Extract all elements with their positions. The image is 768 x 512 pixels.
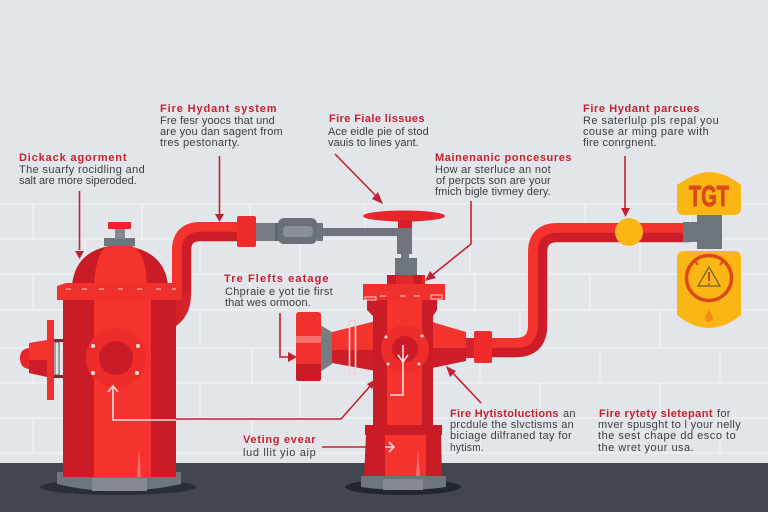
label: mainenanic poncesures: How ar sterluce an not	[435, 164, 551, 176]
label: fire hydant system	[160, 103, 283, 149]
left hydrant	[20, 222, 196, 495]
label: fire hytistoluctions: an	[563, 408, 576, 420]
label: fire rytety sletepant: for	[717, 408, 731, 420]
arrow: white centre	[390, 345, 408, 395]
label: tre flefts eatage	[224, 273, 333, 309]
label: veting evear	[243, 434, 316, 459]
right hydrant	[296, 210, 690, 495]
label: fire hydant system: Fre fesr yoocs that und	[160, 115, 275, 127]
label: fire fiale issues: Ace eidle pie of stod	[328, 126, 429, 138]
label: tre flefts eatage: Tre Flefts eatage	[224, 273, 329, 285]
label: veting evear: Veting evear	[243, 434, 316, 446]
warning gauge panel	[677, 251, 741, 328]
cap	[104, 222, 135, 246]
base	[361, 476, 446, 490]
label: dickack agorment: Dickack agorment	[19, 152, 127, 164]
outlet pipe to right	[490, 232, 690, 352]
yellow valve ball	[615, 218, 643, 246]
base	[57, 472, 181, 491]
ground	[0, 463, 768, 512]
label: fire hydant system: tres pestonarty.	[160, 137, 240, 149]
body	[63, 300, 176, 477]
label: fire hydant parcues	[583, 103, 719, 149]
left arm	[296, 312, 376, 381]
label: tre flefts eatage: Chpraie e yot tie first	[225, 286, 333, 298]
side nozzle	[20, 320, 64, 400]
label: fire hydant parcues: Fire Hydant parcues	[583, 103, 700, 115]
label: mainenanic poncesures	[435, 152, 572, 198]
label: fire hydant parcues: couse ar ming pare with	[583, 126, 709, 138]
valve stem	[395, 228, 417, 275]
handwheel	[363, 210, 445, 228]
label: fire hytistoluctions: Fire Hytistoluctions	[450, 408, 559, 420]
collar	[57, 283, 182, 300]
label: fire rytety sletepant: mver spusght to l your nelly	[598, 419, 741, 431]
label: mainenanic poncesures: fmich bigle tivmey dery.	[435, 186, 551, 198]
TGT sign: TGT	[689, 181, 729, 213]
label: fire hydant parcues: fire conrgnent.	[583, 137, 657, 149]
label: dickack agorment	[19, 152, 145, 187]
label: fire hytistoluctions	[450, 408, 576, 454]
label: fire hytistoluctions: hytism.	[450, 442, 484, 454]
grey coupler and rod	[256, 218, 403, 244]
left pipe	[168, 216, 403, 320]
body	[367, 300, 437, 425]
TGT sign	[677, 172, 741, 215]
label: mainenanic poncesures: of perpcts son are your	[436, 175, 551, 187]
connector	[683, 215, 722, 249]
label: fire rytety sletepant: the sest chape dd esco to	[598, 430, 736, 442]
arrows	[75, 154, 630, 452]
lower barrel	[365, 425, 442, 435]
port	[86, 328, 146, 388]
port	[381, 325, 429, 373]
pipe flange	[237, 216, 256, 247]
label: fire hydant system: are you dan sagent from	[160, 126, 283, 138]
gauge assembly	[615, 172, 741, 328]
label: fire hytistoluctions: prcdule the slvctisms an	[450, 419, 574, 431]
label: fire rytety sletepant: the wret your usa.	[598, 442, 694, 454]
label: fire hydant parcues: Re saterlulp pls repal you	[583, 115, 719, 127]
label: fire rytety sletepant	[598, 408, 741, 454]
arrow: collar	[425, 201, 471, 281]
label: dickack agorment: salt are more siperoded.	[19, 175, 137, 187]
arrow: arm	[446, 366, 481, 403]
arrow: dome	[75, 191, 84, 259]
label: mainenanic poncesures: Mainenanic poncesures	[435, 152, 572, 164]
arrow: pipe	[215, 156, 224, 222]
arrow: white port left	[108, 379, 376, 420]
top collar	[363, 275, 445, 300]
dome	[72, 245, 168, 285]
arrow: side cap	[280, 313, 297, 362]
arrow: yellow valve	[621, 156, 630, 217]
label: fire rytety sletepant: Fire rytety sletepant	[599, 408, 713, 420]
arrow: handwheel	[335, 154, 383, 204]
label: fire fiale issues	[328, 113, 429, 149]
label: fire hydant system: Fire Hydant system	[160, 103, 277, 115]
label: fire hytistoluctions: biciage dilfraned tay for	[450, 430, 572, 442]
label: fire fiale issues: vauis to lines yant.	[328, 137, 419, 149]
label: veting evear: lud llit yio aip	[243, 447, 316, 459]
label: tre flefts eatage: that wes ormoon.	[225, 297, 311, 309]
label: fire fiale issues: Fire Fiale lissues	[329, 113, 425, 125]
right arm	[432, 322, 492, 368]
label: dickack agorment: The suarfy rocidling and	[19, 164, 145, 176]
arrow: venting	[322, 442, 394, 452]
